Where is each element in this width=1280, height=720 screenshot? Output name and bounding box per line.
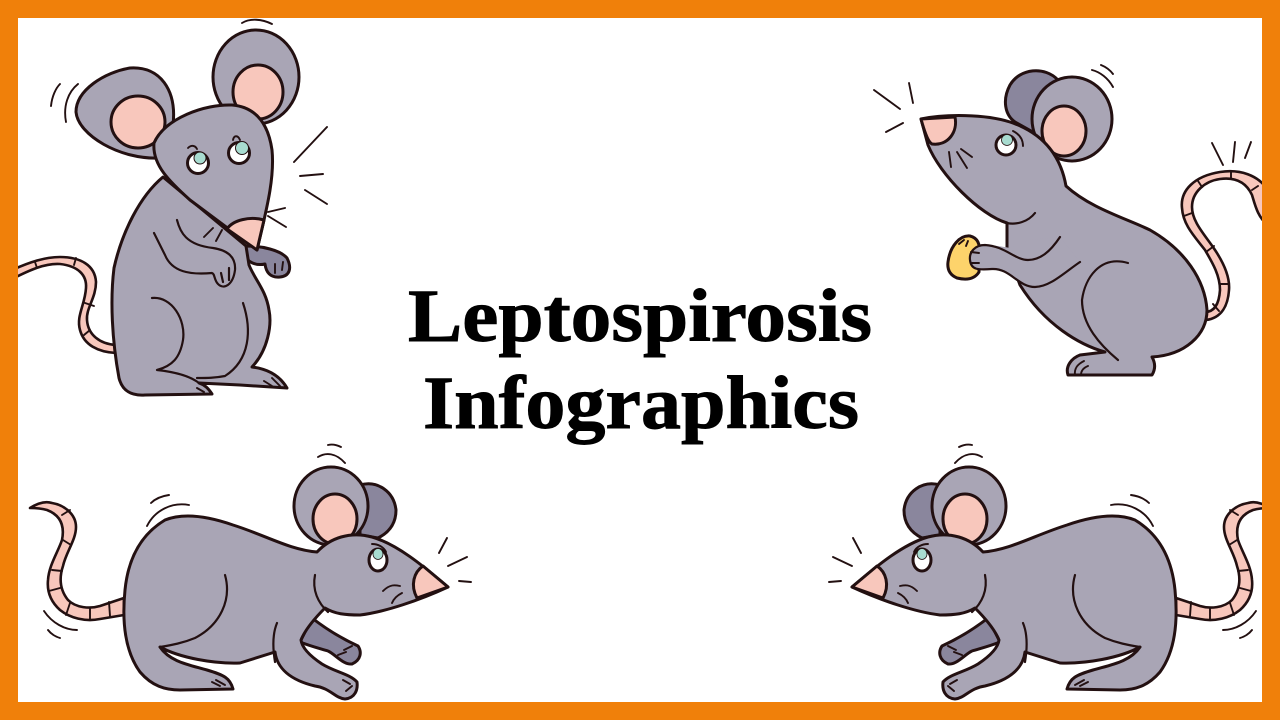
mouse: bottom left, crawling	[30, 445, 471, 699]
left ear	[76, 68, 174, 158]
nose	[413, 566, 448, 598]
right ear	[213, 30, 299, 124]
body lines, paws and whiskers	[152, 208, 286, 392]
tail	[1182, 171, 1268, 320]
tail	[30, 502, 124, 620]
mouse: top right, holding food	[874, 65, 1268, 375]
body	[112, 177, 287, 395]
mouse: top left, standing	[12, 20, 327, 395]
back ear	[360, 484, 396, 538]
body and head	[124, 516, 448, 699]
back ear	[1005, 71, 1058, 136]
eye	[996, 131, 1023, 155]
motion lines	[44, 445, 471, 638]
eyes	[188, 136, 250, 174]
food	[948, 236, 979, 279]
motion lines	[51, 20, 327, 204]
nose	[227, 218, 264, 250]
front ear	[1032, 77, 1112, 161]
back leg dark	[300, 618, 360, 664]
eye	[369, 544, 387, 571]
tail	[12, 257, 116, 353]
body lines	[160, 575, 402, 691]
back arm	[245, 246, 290, 277]
title	[408, 275, 872, 445]
head	[154, 105, 273, 250]
title: Infographics	[423, 362, 859, 445]
nose	[921, 117, 956, 144]
arm and paw	[970, 237, 1080, 287]
mouse: bottom right, mirrored crawling	[829, 445, 1270, 699]
body lines	[949, 149, 1128, 375]
front ear	[294, 467, 368, 545]
body and head	[921, 116, 1207, 375]
title: Leptospirosis	[408, 275, 872, 358]
motion lines	[874, 65, 1251, 165]
